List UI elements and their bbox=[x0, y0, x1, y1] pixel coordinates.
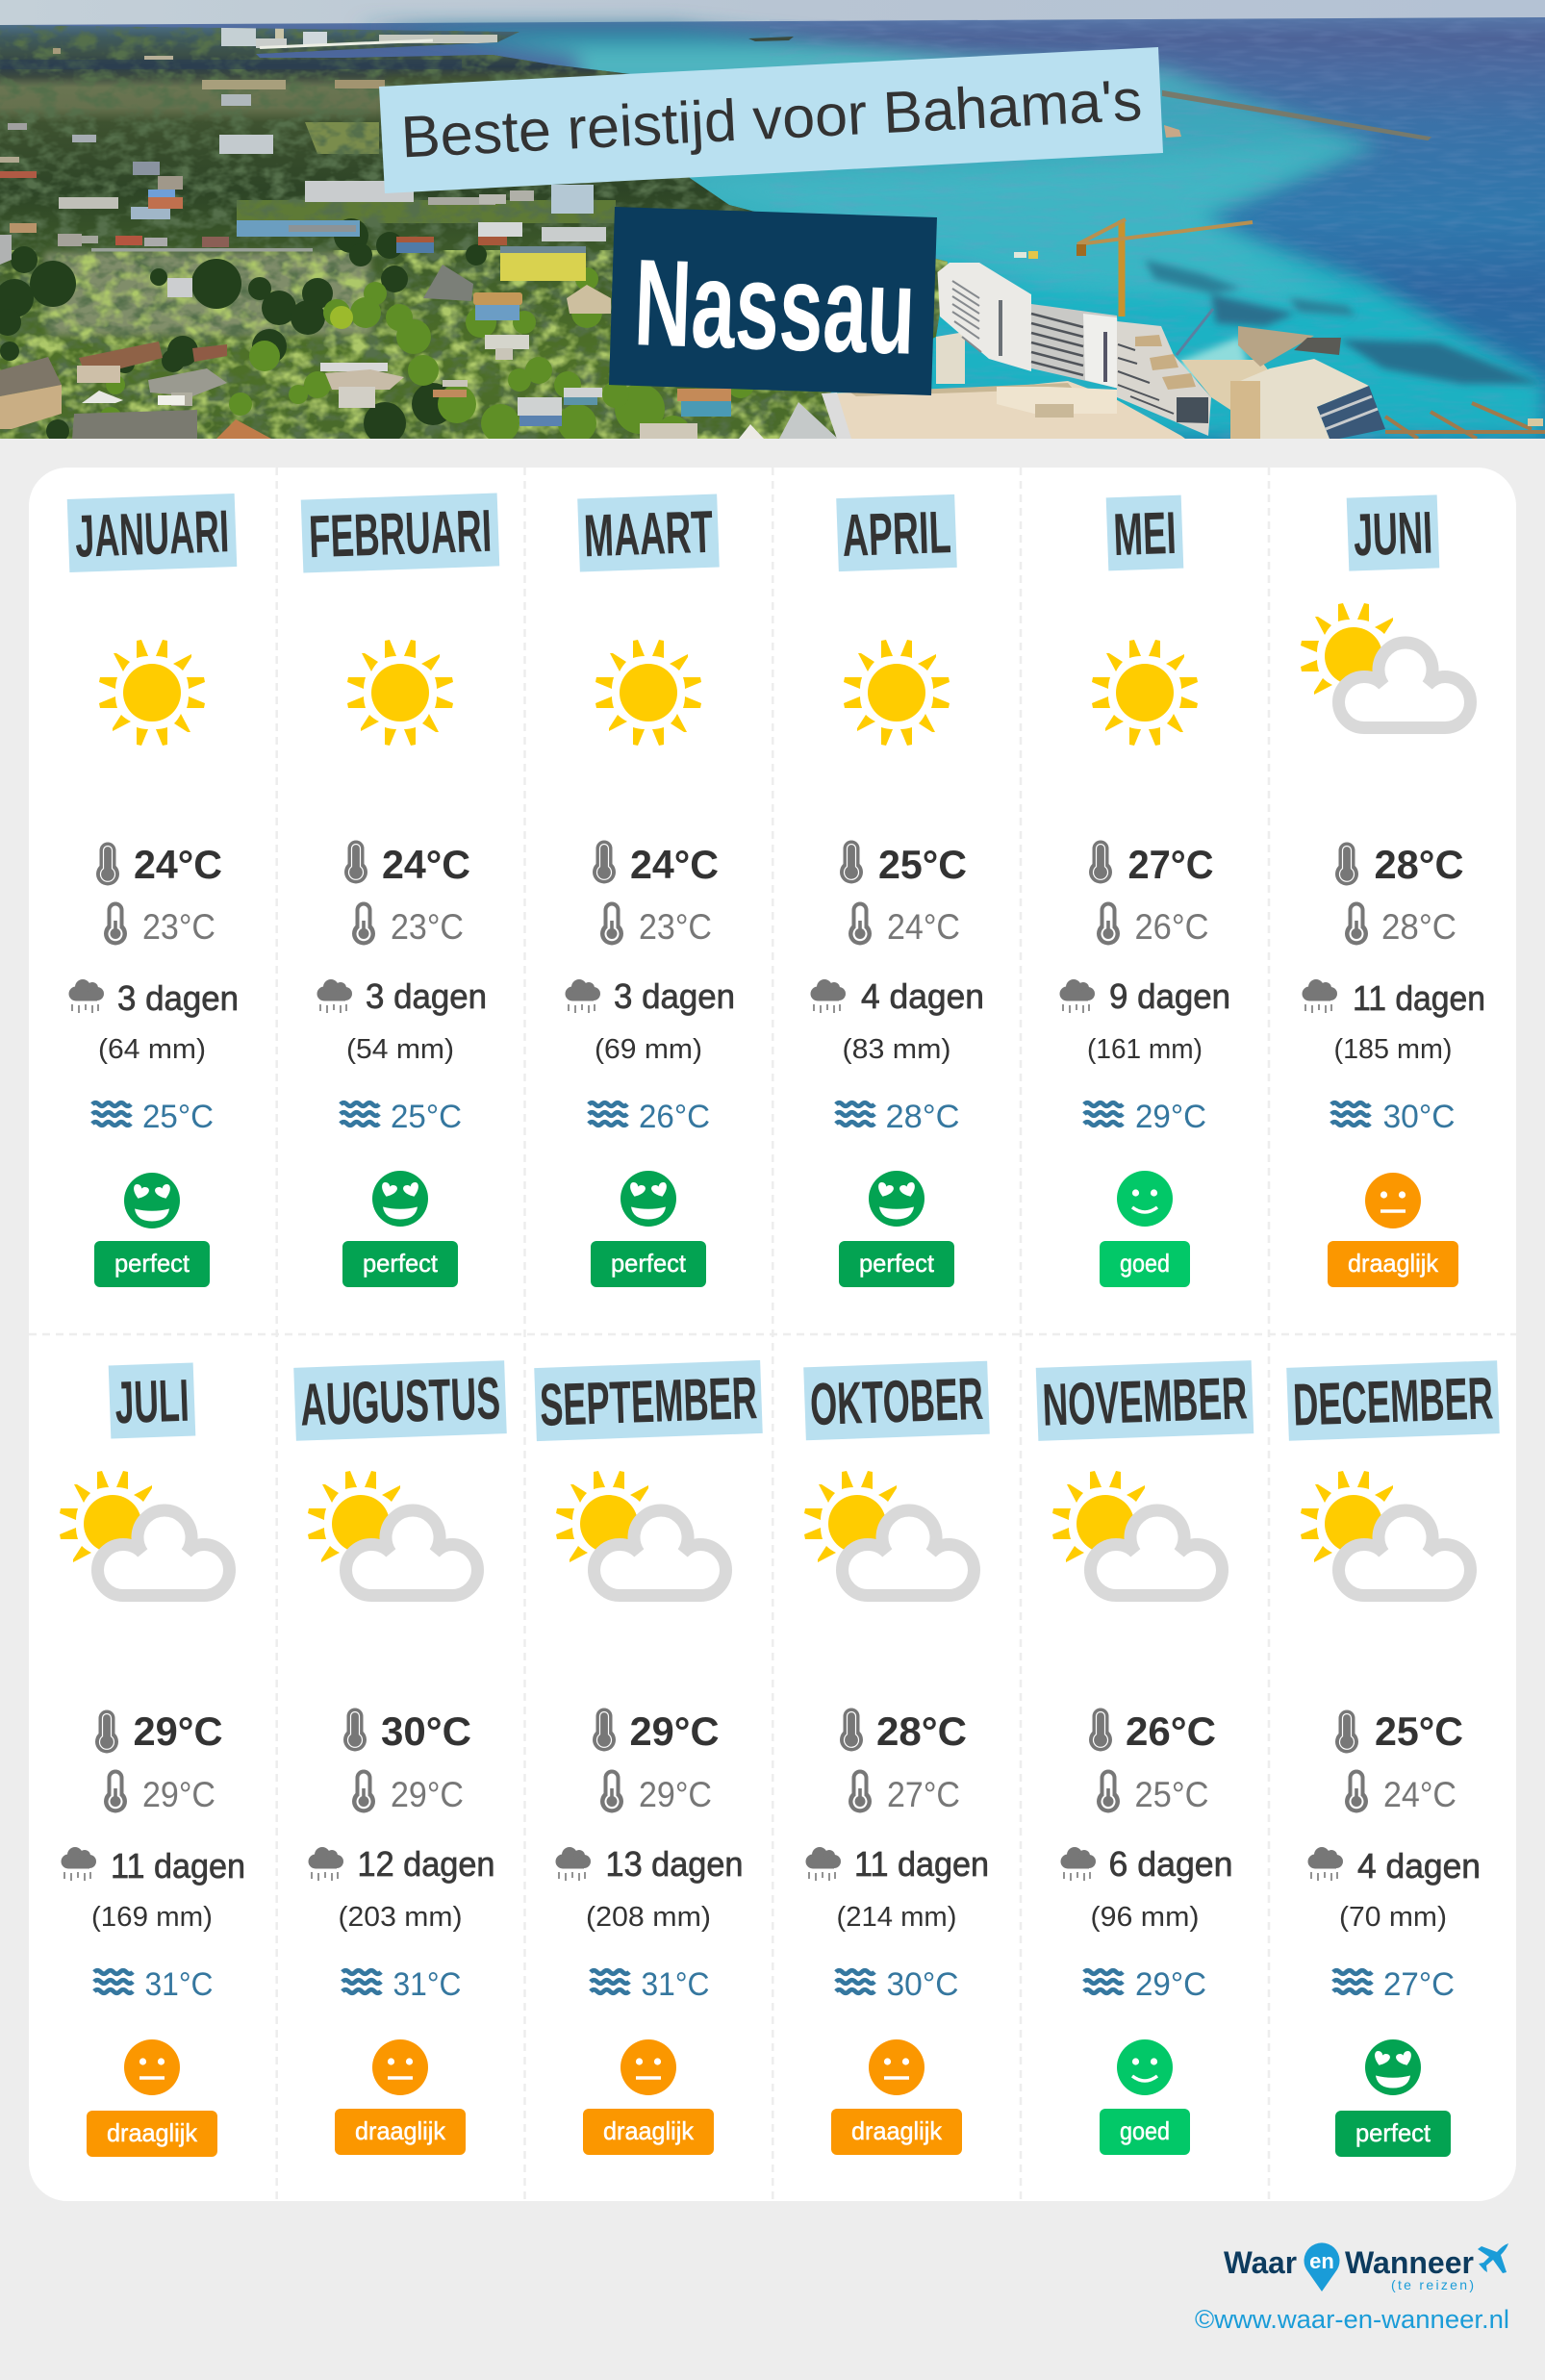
smiley: goed bbox=[1117, 1171, 1173, 1227]
sea temperature bbox=[836, 1966, 958, 2003]
max temperature bbox=[95, 1709, 223, 1754]
rainfall: (161 mm) bbox=[1087, 1034, 1203, 1065]
sea temperature: 25°C bbox=[391, 1099, 462, 1135]
rating: perfect: perfect bbox=[363, 1249, 439, 1278]
rating: perfect bbox=[342, 1241, 458, 1287]
max temperature bbox=[344, 841, 470, 887]
rating: draaglijk bbox=[583, 2109, 714, 2155]
rain days: 13 dagen bbox=[606, 1844, 743, 1884]
min temperature: 27°C bbox=[887, 1775, 960, 1814]
rating: perfect: perfect bbox=[114, 1249, 190, 1278]
rain days bbox=[69, 978, 239, 1018]
month label: JULI bbox=[114, 1368, 190, 1436]
rating: perfect: perfect bbox=[611, 1249, 687, 1278]
min temperature bbox=[848, 1770, 960, 1814]
min temperature bbox=[104, 1770, 215, 1814]
rain days: 4 dagen bbox=[861, 976, 984, 1016]
rating: goed: goed bbox=[1120, 2116, 1170, 2145]
month: juli bbox=[60, 1362, 245, 2157]
header photo: aerial view of Nassau coast bbox=[0, 0, 1545, 450]
website credit: ©www.waar-en-wanneer.nl bbox=[1195, 2305, 1509, 2334]
month label: APRIL bbox=[841, 499, 952, 570]
rainfall: (214 mm) bbox=[836, 1902, 957, 1933]
max temperature bbox=[96, 842, 222, 887]
rain days: 3 dagen bbox=[614, 976, 735, 1016]
sea temperature bbox=[1084, 1099, 1206, 1135]
sea temperature bbox=[836, 1099, 960, 1135]
min temperature: 23°C bbox=[391, 907, 464, 947]
month: november bbox=[1036, 1360, 1254, 2155]
max temperature: 24°C bbox=[134, 842, 222, 887]
rain days: 11 dagen bbox=[854, 1844, 989, 1884]
sea temperature: 27°C bbox=[1383, 1966, 1455, 2003]
rainfall: (64 mm) bbox=[98, 1034, 206, 1065]
month label: AUGUSTUS bbox=[299, 1365, 501, 1439]
panel: monthly climate table bbox=[29, 468, 1516, 2201]
rain days: 9 dagen bbox=[1109, 976, 1230, 1016]
max temperature: 24°C bbox=[630, 842, 719, 887]
max temperature: 29°C bbox=[629, 1709, 720, 1754]
icon: sun and cloud bbox=[1301, 1471, 1470, 1595]
rain days bbox=[1303, 978, 1485, 1018]
rain days bbox=[1060, 976, 1230, 1016]
rating: perfect: perfect bbox=[859, 1249, 935, 1278]
month label: NOVEMBER bbox=[1041, 1365, 1249, 1439]
month: juni bbox=[1301, 494, 1485, 1287]
sea temperature bbox=[341, 1099, 462, 1135]
month label: MEI bbox=[1112, 500, 1178, 569]
sea temperature bbox=[94, 1966, 214, 2003]
month: maart bbox=[566, 494, 735, 1287]
rain days: 11 dagen bbox=[111, 1846, 245, 1886]
rating: draaglijk: draaglijk bbox=[851, 2116, 943, 2145]
rain days: 12 dagen bbox=[358, 1844, 494, 1884]
min temperature bbox=[1345, 902, 1456, 947]
city banner bbox=[609, 207, 937, 395]
sea temperature: 28°C bbox=[885, 1099, 960, 1135]
icon: airplane bbox=[1478, 2243, 1508, 2273]
max temperature: 28°C bbox=[876, 1709, 967, 1754]
min temperature bbox=[1097, 1770, 1208, 1814]
min temperature bbox=[104, 902, 215, 947]
sea temperature: 26°C bbox=[639, 1099, 710, 1135]
logo: Waar en Wanneer bbox=[1224, 2242, 1508, 2292]
max temperature bbox=[343, 1709, 471, 1754]
icon: sun and cloud bbox=[60, 1471, 229, 1595]
rain days: 3 dagen bbox=[366, 976, 487, 1016]
logo: Waar en Wanneer: Wanneer bbox=[1345, 2245, 1474, 2280]
rating: draaglijk bbox=[831, 2109, 962, 2155]
sea temperature: 29°C bbox=[1135, 1099, 1206, 1135]
sea temperature: 30°C bbox=[887, 1966, 958, 2003]
min temperature: 26°C bbox=[1135, 907, 1208, 947]
month label: JUNI bbox=[1353, 500, 1433, 569]
rating: draaglijk: draaglijk bbox=[603, 2116, 695, 2145]
trees bright bbox=[99, 267, 754, 450]
min temperature: 25°C bbox=[1135, 1775, 1208, 1814]
min temperature: 23°C bbox=[639, 907, 712, 947]
smiley: goed bbox=[1117, 2039, 1173, 2095]
month: januari bbox=[67, 494, 239, 1287]
max temperature: 28°C bbox=[1374, 842, 1464, 887]
min temperature: 29°C bbox=[142, 1775, 215, 1814]
max temperature: 24°C bbox=[382, 842, 470, 887]
icon: map pin bbox=[1304, 2242, 1339, 2291]
sea temperature bbox=[1331, 1099, 1455, 1135]
month label: SEPTEMBER bbox=[539, 1365, 758, 1439]
max temperature bbox=[1089, 841, 1214, 887]
rainfall: (70 mm) bbox=[1339, 1902, 1447, 1933]
month: mei bbox=[1060, 495, 1230, 1287]
rainfall: (169 mm) bbox=[91, 1902, 213, 1933]
icon: sun bbox=[99, 640, 205, 746]
month label: JANUARI bbox=[74, 498, 230, 570]
icon: sun and cloud bbox=[1052, 1471, 1222, 1595]
rating: draaglijk bbox=[87, 2111, 217, 2157]
smiley: draaglijk bbox=[124, 2039, 180, 2095]
min temperature bbox=[600, 902, 712, 947]
month label bbox=[1106, 495, 1183, 570]
rainfall: (208 mm) bbox=[586, 1902, 711, 1933]
smiley: perfect bbox=[372, 1171, 428, 1227]
max temperature bbox=[593, 1709, 720, 1754]
rating: draaglijk bbox=[1328, 1241, 1458, 1287]
min temperature bbox=[848, 902, 960, 947]
rating: draaglijk: draaglijk bbox=[1348, 1249, 1439, 1278]
month: december bbox=[1286, 1360, 1500, 2157]
month: oktober bbox=[803, 1361, 990, 2155]
icon: sun bbox=[595, 640, 701, 746]
month label: OKTOBER bbox=[809, 1366, 984, 1438]
month label bbox=[1347, 494, 1439, 571]
max temperature: 25°C bbox=[878, 842, 967, 887]
max temperature: 25°C bbox=[1375, 1709, 1463, 1754]
month label bbox=[1036, 1360, 1254, 1441]
max temperature bbox=[840, 841, 967, 887]
month label bbox=[293, 1360, 507, 1441]
min temperature: 29°C bbox=[639, 1775, 712, 1814]
rain days: 11 dagen bbox=[1353, 978, 1485, 1018]
sea temperature: 25°C bbox=[142, 1099, 214, 1135]
title banner bbox=[379, 47, 1163, 193]
smiley: perfect bbox=[869, 1171, 924, 1227]
month label bbox=[109, 1362, 195, 1439]
month: februari bbox=[301, 493, 499, 1287]
min temperature bbox=[352, 1770, 464, 1814]
rain days: 4 dagen bbox=[1357, 1846, 1481, 1886]
max temperature: 27°C bbox=[1127, 842, 1214, 887]
logo: Waar en Wanneer: Waar bbox=[1224, 2245, 1297, 2280]
max temperature: 26°C bbox=[1126, 1709, 1216, 1754]
rainfall: (185 mm) bbox=[1333, 1034, 1453, 1065]
rainfall: (96 mm) bbox=[1090, 1902, 1200, 1933]
logo: Waar en Wanneer: (te reizen) bbox=[1391, 2277, 1474, 2292]
icon: sun and cloud bbox=[804, 1471, 974, 1595]
sea temperature bbox=[342, 1966, 462, 2003]
reefs bbox=[1145, 260, 1541, 384]
rainfall: (83 mm) bbox=[842, 1034, 951, 1065]
smiley: draaglijk bbox=[372, 2039, 428, 2095]
rating: draaglijk bbox=[335, 2109, 466, 2155]
smiley: perfect bbox=[621, 1171, 676, 1227]
max temperature: 30°C bbox=[381, 1709, 471, 1754]
buildings lower area bbox=[0, 220, 764, 439]
sea temperature: 31°C bbox=[393, 1966, 462, 2003]
icon: sun and cloud bbox=[556, 1471, 725, 1595]
rating: goed bbox=[1100, 2109, 1190, 2155]
title banner: Beste reistijd voor Bahama's bbox=[399, 67, 1144, 169]
sea temperature bbox=[92, 1099, 214, 1135]
month: september bbox=[534, 1360, 763, 2155]
buildings upper area bbox=[0, 80, 594, 243]
max temperature: 29°C bbox=[133, 1709, 223, 1754]
month label bbox=[803, 1361, 990, 1440]
sea temperature bbox=[589, 1099, 710, 1135]
min temperature: 28°C bbox=[1381, 907, 1456, 947]
min temperature bbox=[1345, 1770, 1456, 1814]
rating: perfect bbox=[94, 1241, 210, 1287]
icon: sun bbox=[844, 640, 950, 746]
city banner: Nassau bbox=[632, 234, 918, 381]
max temperature bbox=[593, 841, 719, 887]
icon: sun bbox=[347, 640, 453, 746]
smiley: draaglijk bbox=[1365, 1173, 1421, 1228]
resort buildings bbox=[822, 219, 1545, 439]
rating: draaglijk: draaglijk bbox=[107, 2118, 198, 2147]
min temperature: 29°C bbox=[391, 1775, 464, 1814]
rainfall: (54 mm) bbox=[346, 1034, 454, 1065]
min temperature bbox=[600, 1770, 712, 1814]
trees dark bbox=[0, 218, 487, 444]
month label bbox=[534, 1360, 763, 1441]
rating: perfect: perfect bbox=[1355, 2118, 1431, 2147]
rating: goed bbox=[1100, 1241, 1190, 1287]
min temperature: 23°C bbox=[142, 907, 215, 947]
min temperature: 24°C bbox=[1383, 1775, 1456, 1814]
smiley: draaglijk bbox=[621, 2039, 676, 2095]
month label: FEBRUARI bbox=[308, 498, 493, 570]
rain days bbox=[566, 976, 735, 1016]
min temperature bbox=[1097, 902, 1208, 947]
max temperature bbox=[1335, 1709, 1463, 1754]
smiley: perfect bbox=[124, 1173, 180, 1228]
icon: sun bbox=[1092, 640, 1198, 746]
rain days: 3 dagen bbox=[117, 978, 239, 1018]
smiley: perfect bbox=[1365, 2039, 1421, 2095]
rainfall: (69 mm) bbox=[595, 1034, 702, 1065]
icon: sun and cloud bbox=[308, 1471, 477, 1595]
month label: MAART bbox=[583, 499, 714, 570]
month: augustus bbox=[293, 1360, 507, 2155]
rain days: 6 dagen bbox=[1108, 1844, 1233, 1884]
rain days bbox=[317, 976, 487, 1016]
month: april bbox=[810, 494, 984, 1287]
month label bbox=[577, 494, 720, 572]
month label bbox=[301, 493, 499, 573]
sea temperature bbox=[1333, 1966, 1455, 2003]
icon: sun and cloud bbox=[1301, 603, 1470, 727]
sea temperature: 29°C bbox=[1135, 1966, 1206, 2003]
min temperature bbox=[352, 902, 464, 947]
logo: Waar en Wanneer: en bbox=[1309, 2249, 1334, 2273]
rating: draaglijk: draaglijk bbox=[355, 2116, 446, 2145]
sea temperature: 31°C bbox=[641, 1966, 710, 2003]
rating: perfect bbox=[591, 1241, 706, 1287]
distant resort towers bbox=[221, 27, 256, 46]
smiley: draaglijk bbox=[869, 2039, 924, 2095]
rating: goed: goed bbox=[1120, 1249, 1170, 1278]
sea temperature: 30°C bbox=[1383, 1099, 1455, 1135]
rating: perfect bbox=[1335, 2111, 1451, 2157]
sea temperature bbox=[591, 1966, 710, 2003]
rainfall: (203 mm) bbox=[339, 1902, 462, 1933]
month label bbox=[836, 494, 957, 571]
rating: perfect bbox=[839, 1241, 954, 1287]
month label bbox=[67, 494, 237, 572]
min temperature: 24°C bbox=[887, 907, 960, 947]
sea temperature: 31°C bbox=[144, 1966, 214, 2003]
sea temperature bbox=[1084, 1966, 1206, 2003]
max temperature bbox=[1335, 842, 1464, 887]
